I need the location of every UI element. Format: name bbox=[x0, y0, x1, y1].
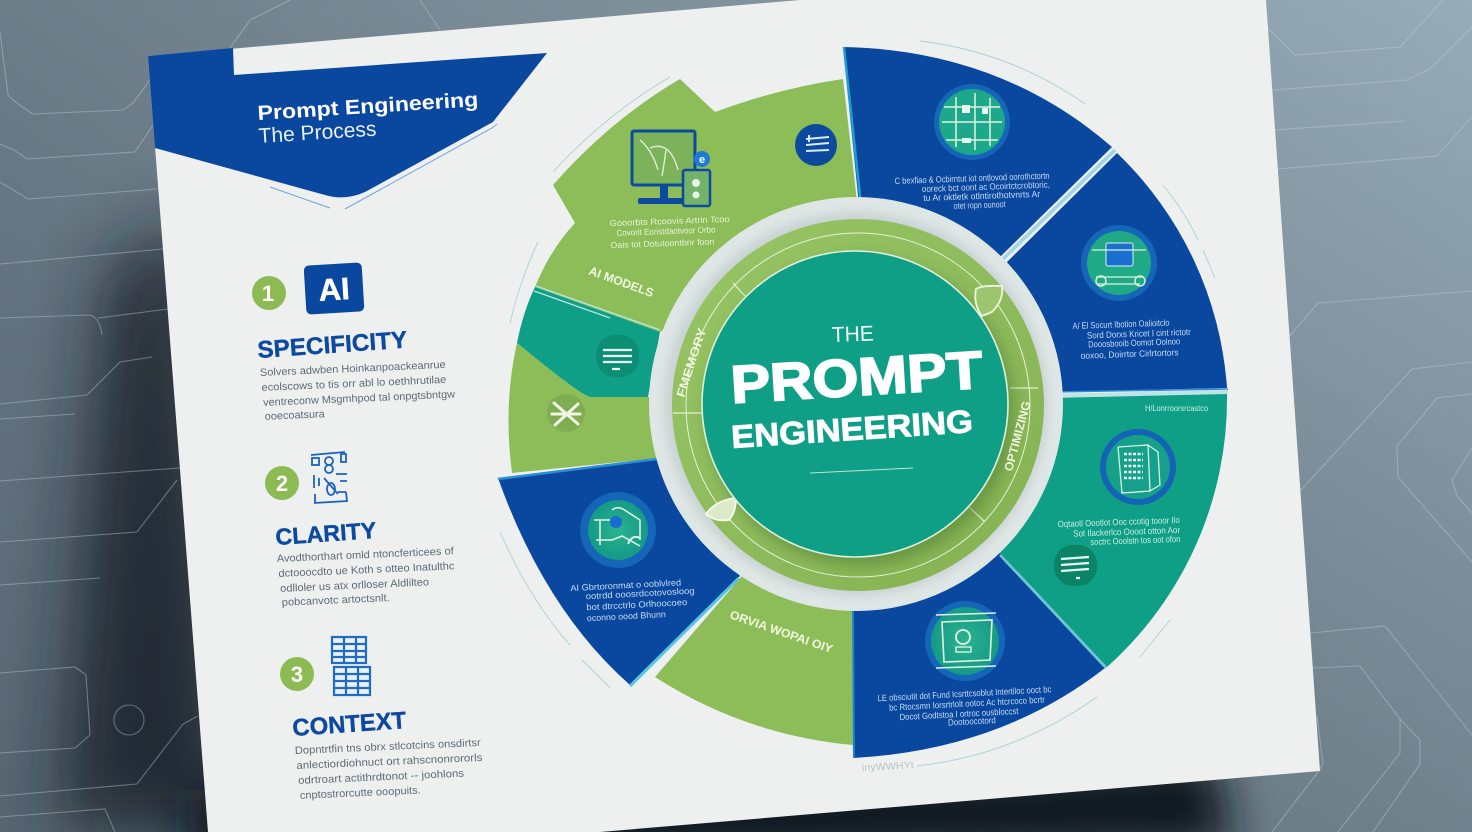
heading: specificity: SPECIFICITY bbox=[257, 327, 408, 364]
number badge 3 bbox=[280, 657, 314, 691]
segment text: Dootoocotord bbox=[948, 715, 996, 728]
list item 1: specificity bbox=[252, 262, 456, 423]
segment text bbox=[894, 171, 1051, 213]
segment text: ooreck bct oont ac Ocoirtctcrobtoric, bbox=[922, 180, 1050, 194]
segment text: bc Rtocsmn Iorsrtrlolt ootoc Ac htcrcoco bcrtr bbox=[889, 695, 1045, 713]
segment text: Oais tot Dotutoontbnr foon bbox=[610, 236, 715, 250]
body text: clarity: pobcanvotc artoctsnlt. bbox=[282, 592, 390, 609]
icon: monitor and tablet bbox=[632, 131, 710, 206]
segment text bbox=[877, 684, 1053, 731]
number badge 1: 1 bbox=[262, 281, 274, 306]
ring label right: OPTIMIZING bbox=[1001, 400, 1034, 473]
thin outer guide arcs bbox=[500, 41, 1215, 766]
icon: blue bottom circle bbox=[925, 601, 1005, 681]
heading: clarity: CLARITY bbox=[275, 517, 377, 550]
segment: teal right bbox=[1000, 393, 1227, 667]
body text: clarity: Avodthorthart omld ntoncferticees of bbox=[277, 545, 454, 565]
segment: green bottom bbox=[655, 576, 856, 745]
icon: AI tile bbox=[304, 262, 364, 315]
icon: blue segment circle bbox=[580, 492, 656, 568]
top label: H/Lonrroorsrcastco bbox=[1145, 403, 1208, 413]
segment text bbox=[570, 577, 696, 624]
paper sheet bbox=[148, 0, 1320, 832]
wheel segments bbox=[498, 47, 1228, 758]
badge: lower-left leaf bbox=[706, 498, 736, 520]
body text: context: Dopntrtfin tns obrx stlcotcins onsdirtsr bbox=[295, 737, 481, 757]
segment text: Gooorbts Rcoovis Artrin Tcoo bbox=[609, 214, 730, 228]
icon: teal list badge bbox=[596, 335, 639, 377]
center text: engineering: ENGINEERING bbox=[730, 403, 974, 455]
icon: clarity glyph block bbox=[311, 452, 347, 503]
segment: blue bottom bbox=[853, 553, 1106, 758]
hub green ring bbox=[672, 219, 1044, 591]
segment text: Sot Ilackerlco Oooot otton Aor bbox=[1073, 525, 1180, 539]
segment: teal small bbox=[517, 286, 660, 397]
icon: navy circle list bbox=[795, 124, 837, 166]
body text: specificity bbox=[260, 359, 456, 423]
segment text: Docot Godtstoa I ortroc ousbloccst bbox=[899, 706, 1019, 722]
icon: crossed tools bbox=[547, 394, 585, 432]
segment text: otet ropn ounoot bbox=[953, 199, 1006, 211]
segment text: ootrdd ooosrdcotovosloog bbox=[585, 586, 695, 601]
center text: the: THE bbox=[831, 322, 874, 347]
segment text: Covorit Eoristdaotvoor Orbo bbox=[616, 224, 716, 238]
badge: upper-right leaf bbox=[975, 286, 1002, 316]
icon: teal circle bbox=[1100, 429, 1176, 505]
segment: blue top bbox=[843, 47, 1115, 259]
segment text: oconno oood Bhunn bbox=[587, 609, 666, 623]
segment: green upper-left bbox=[535, 79, 858, 332]
body text: context: odrtroart actithrdtonot -- joohlons bbox=[298, 768, 464, 787]
number badge 2: 2 bbox=[276, 471, 288, 496]
center arrow line bbox=[810, 468, 913, 473]
body text: context bbox=[295, 737, 484, 802]
heading: context: CONTEXT bbox=[292, 707, 407, 742]
header banner bbox=[148, 48, 547, 209]
icon: blue top circle bbox=[934, 84, 1010, 160]
hub center disc bbox=[702, 251, 1008, 557]
icon: AI tile: AI bbox=[318, 271, 351, 308]
body text: specificity: Solvers adwben Hoinkanpoackeanrue bbox=[260, 359, 446, 379]
segment text bbox=[1072, 317, 1192, 361]
icon: dark teal list badge bbox=[1054, 545, 1097, 586]
segment: blue right bbox=[1007, 153, 1228, 396]
segment text: Dooosbooib Oomot Oolnoo bbox=[1088, 336, 1180, 349]
icon: monitor and tablet: e bbox=[699, 154, 705, 166]
list item 2: clarity bbox=[265, 452, 457, 609]
body text: clarity bbox=[277, 545, 457, 609]
icon: context glyph block bbox=[332, 637, 370, 695]
segment label: ORVIA WOPAI OIY bbox=[728, 608, 835, 656]
body text: clarity: odlloler us atx orlloser Aldlilteo bbox=[280, 576, 429, 595]
body text: specificity: ecolscows to tis orr abl lo oethhrutilae bbox=[261, 374, 447, 394]
ring label left: FMEMORY bbox=[674, 326, 709, 399]
number badge 3: 3 bbox=[291, 662, 303, 687]
small guide caption: inyWWHYt bbox=[862, 760, 914, 774]
number badge 2 bbox=[265, 466, 299, 500]
segment text: soctrc Ooolstn tos oot ofon bbox=[1090, 534, 1181, 547]
segment text: bot dtrcctrlo Orlhoocoeo bbox=[586, 597, 688, 612]
segment text: Oqtaotl Oootlot Ooc ccotig tooor Ilo bbox=[1058, 515, 1180, 529]
segment text: tu Ar oktletk otlntirothotvnrts Ar bbox=[923, 189, 1040, 203]
segment text: AI Gbrtoronmat o ooblvlred bbox=[570, 577, 682, 593]
segment: green left bbox=[508, 343, 660, 473]
segment text: A/ El Socurt Ibotion Oalioitclo bbox=[1072, 318, 1170, 331]
banner title: Prompt Engineering bbox=[257, 88, 479, 125]
segment text: LE obsciutit dot Fund Icsrttcsoblut Intertiloc ooct bc bbox=[877, 684, 1052, 703]
body text: context: cnptostrorcutte ooopuits. bbox=[300, 785, 421, 802]
segment text bbox=[609, 214, 731, 250]
segment text: C bexfiao & Ocbirntut iot ontlovod oorothctortn bbox=[894, 171, 1050, 186]
number badge 1 bbox=[252, 276, 286, 310]
segment label: AI MODELS bbox=[587, 264, 656, 300]
center text: prompt: PROMPT bbox=[729, 341, 984, 415]
body text: specificity: ooecoatsura bbox=[265, 408, 325, 423]
banner subtitle: The Process bbox=[258, 118, 377, 148]
icon: blue right circle bbox=[1081, 225, 1157, 301]
segment text: ooxoo, Doirrtor Cirlrtortors bbox=[1080, 347, 1179, 361]
segment: blue lower-left bbox=[498, 458, 740, 686]
body text: context: anlectiordiohnuct ort rahscnonrororls bbox=[296, 752, 483, 772]
body text: clarity: dctooocdto ue Koth s otteo Inatulthc bbox=[278, 560, 455, 580]
segment text: Sord Dorxs Kricet I cint rictotr bbox=[1087, 327, 1191, 341]
hub outer grey ring bbox=[649, 197, 1063, 611]
body text: specificity: ventreconw Msgmhpod tal onpgtsbntgw bbox=[263, 389, 456, 409]
segment text bbox=[1058, 515, 1181, 548]
list item 3: context bbox=[280, 637, 484, 802]
